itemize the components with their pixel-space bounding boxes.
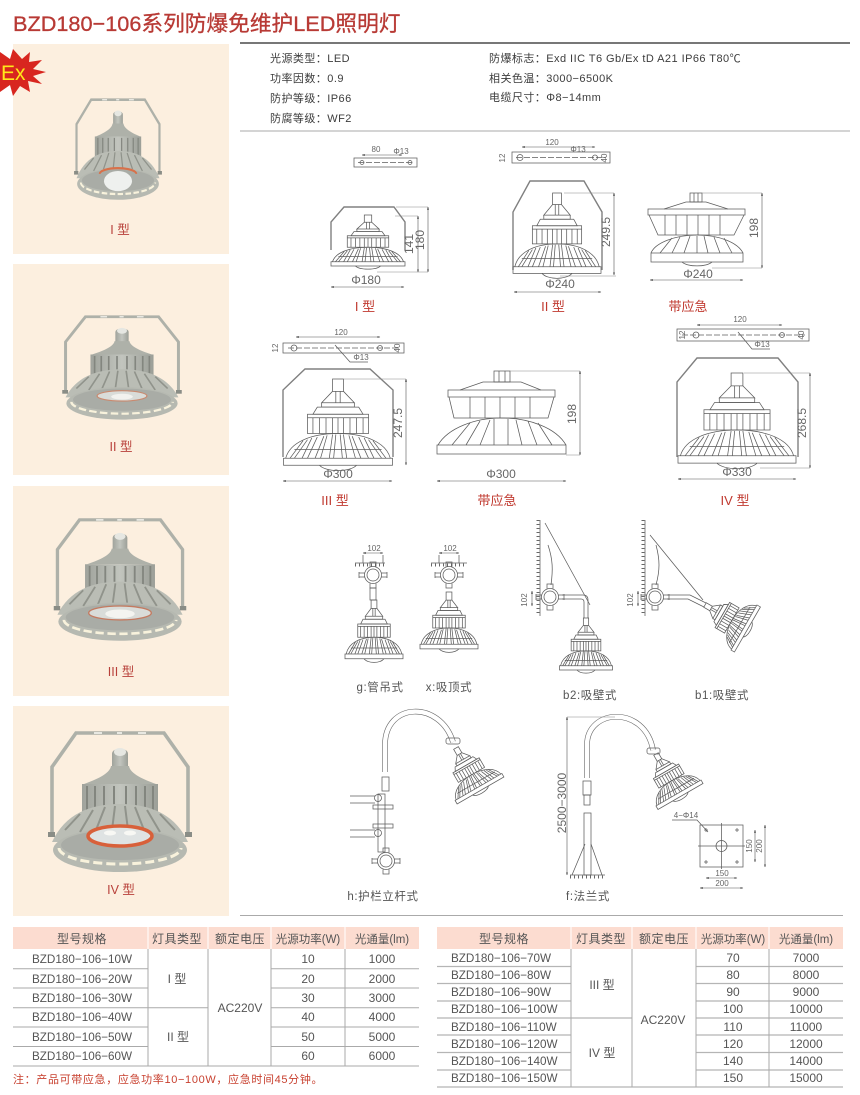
table: right spec table: 光通量(lm): [779, 932, 833, 946]
table: right spec table: 8000: [793, 968, 820, 982]
install: b1 wall: [626, 520, 763, 702]
table: left spec table: 6000: [369, 1049, 396, 1063]
table: right spec table: BZD180−106−80W: [451, 969, 551, 982]
drawing: type II: 249.5: [599, 217, 613, 247]
label: b1: b1:吸壁式: [695, 688, 749, 702]
drawing: type II: [498, 138, 616, 314]
icon: Ex explosion badge: Ex: [1, 62, 26, 85]
table: left spec table: 光源功率(W): [276, 932, 340, 946]
panel: product photo type II: [13, 264, 229, 475]
label: b2: b2:吸壁式: [563, 688, 617, 702]
drawing: emergency 240: 198: [747, 218, 761, 238]
table: right spec table: 型号规格: [479, 931, 529, 946]
drawing: type IV: Φ330: [722, 465, 752, 479]
table: left spec table: BZD180−106−10W: [32, 953, 132, 966]
drawing: emergency 300: 198: [565, 404, 579, 424]
install: b2 wall: 102: [520, 593, 529, 607]
spec: cable size: 电缆尺寸：Φ8−14mm: [489, 90, 601, 104]
flange plan: 150: [715, 869, 729, 878]
flange plan: 150: [745, 839, 754, 853]
table: right spec table: 额定电压: [639, 931, 689, 946]
table: left spec table: BZD180−106−20W: [32, 973, 132, 986]
table: left spec table: 型号规格: [57, 931, 107, 946]
table: left spec table: 40: [301, 1010, 315, 1024]
table: left spec table: 3000: [369, 991, 396, 1005]
spec: light source: 光源类型：LED: [270, 51, 350, 65]
table: left spec table: 20: [301, 972, 315, 986]
table: left spec table: AC220V: [218, 1001, 262, 1015]
drawing: type I: 80: [372, 145, 381, 154]
flange plan: 200: [755, 839, 764, 853]
label: f: f:法兰式: [566, 889, 610, 903]
title: BZD180−106系列防爆免维护LED照明灯: [13, 11, 400, 36]
note: 注：产品可带应急，应急功率10−100W，应急时间45分钟。: [13, 1072, 323, 1086]
table: right spec table: 14000: [789, 1054, 823, 1068]
install: f flange post: [555, 717, 765, 903]
spec: power factor: 功率因数：0.9: [270, 71, 344, 85]
table: left spec table: I 型: [168, 972, 186, 986]
install: g pipe hanging: 102: [367, 544, 381, 553]
table: right spec table: 光源功率(W): [701, 932, 765, 946]
table: right spec table: 10000: [789, 1002, 823, 1016]
table: left spec table: II 型: [167, 1030, 189, 1044]
table: left spec table: 10: [301, 952, 315, 966]
drawing: type III: Φ300: [323, 467, 353, 481]
drawing: type II: Φ13: [570, 145, 586, 154]
table: left spec table: BZD180−106−30W: [32, 992, 132, 1005]
table: left spec table: 50: [301, 1030, 315, 1044]
label: I 型: I 型: [355, 299, 375, 314]
table: right spec table: BZD180−106−70W: [451, 952, 551, 965]
table: left spec table: 光通量(lm): [355, 932, 409, 946]
install: x ceiling: [420, 544, 478, 694]
drawing: emergency 240: [648, 193, 762, 314]
drawing: type IV: 40: [797, 330, 806, 339]
panel: product photo type I: [13, 44, 229, 254]
drawing: emergency 300: Φ300: [486, 467, 516, 481]
label: emergency: 带应急: [668, 299, 708, 314]
table: right spec table: 灯具类型: [576, 932, 626, 946]
drawing: type IV: [677, 315, 810, 508]
label: I 型: I 型: [110, 223, 130, 237]
drawing: type IV: Φ13: [754, 340, 770, 349]
drawing: type III: 120: [334, 328, 348, 337]
label: g: g:管吊式: [356, 680, 404, 694]
drawing: type II: 12: [498, 153, 507, 162]
drawing: emergency 240: Φ240: [683, 267, 713, 281]
table: right spec table: 120: [723, 1037, 743, 1051]
table: right spec table: IV 型: [589, 1046, 615, 1060]
label: III 型: III 型: [321, 493, 349, 508]
table: right spec table: 70: [726, 951, 740, 965]
install: h guard post: [347, 712, 505, 903]
spec: color temperature: 相关色温：3000−6500K: [489, 71, 614, 85]
spec: explosion mark: 防爆标志：Exd IIC T6 Gb/Ex tD A21 IP66 T80℃: [489, 51, 741, 65]
table: right spec table: 7000: [793, 951, 820, 965]
icon: lamp photo IV: [48, 732, 192, 872]
table: right spec table: AC220V: [641, 1013, 685, 1027]
table: right spec table: III 型: [589, 978, 615, 992]
install: b1 wall: 102: [626, 593, 635, 607]
table: right spec table: BZD180−106−90W: [451, 986, 551, 999]
table: right spec table: 9000: [793, 985, 820, 999]
label: emergency: 带应急: [477, 493, 517, 508]
install: x ceiling: 102: [443, 544, 457, 553]
drawing: type I: Φ180: [351, 273, 381, 287]
table: right spec table: 90: [726, 985, 740, 999]
flange plan: 200: [715, 879, 729, 888]
table: right spec table: BZD180−106−100W: [451, 1003, 558, 1016]
table: right spec table: BZD180−106−150W: [451, 1072, 558, 1085]
install: g pipe hanging: [345, 544, 404, 694]
drawing: type II: 40: [600, 153, 609, 162]
icon: Ex explosion badge: [0, 49, 46, 96]
table: right spec table: 110: [723, 1020, 743, 1034]
spec panel: [240, 42, 850, 132]
table: right spec table: [437, 927, 843, 1087]
drawing: type II: Φ240: [545, 277, 575, 291]
table: left spec table: 额定电压: [215, 931, 265, 946]
table: right spec table: 150: [723, 1071, 743, 1085]
drawing: type IV: 268.5: [795, 408, 809, 438]
label: x: x:吸顶式: [426, 681, 472, 694]
table: right spec table: 100: [723, 1002, 743, 1016]
table: left spec table: [13, 927, 419, 1066]
label: III 型: III 型: [108, 665, 134, 679]
table: right spec table: 15000: [789, 1071, 823, 1085]
label: IV 型: IV 型: [721, 493, 749, 508]
table: left spec table: BZD180−106−60W: [32, 1050, 132, 1063]
table: right spec table: 11000: [790, 1020, 823, 1034]
label: II 型: II 型: [541, 299, 565, 314]
table: right spec table: 12000: [789, 1037, 823, 1051]
table: left spec table: BZD180−106−50W: [32, 1031, 132, 1044]
drawing: type III: 247.5: [391, 408, 405, 438]
drawing: type I: 180: [413, 230, 427, 250]
spec: anticorrosion grade: 防腐等级：WF2: [270, 111, 352, 125]
install: f flange post: 2500−3000: [555, 772, 569, 833]
icon: lamp photo III: [54, 519, 186, 641]
label: IV 型: IV 型: [107, 883, 135, 897]
drawing: type III: 40: [393, 343, 402, 352]
drawing: type III: Φ13: [353, 353, 369, 362]
drawing: type III: 12: [271, 343, 280, 352]
table: right spec table: 140: [723, 1054, 743, 1068]
icon: lamp photo I: [74, 99, 162, 200]
table: left spec table: 5000: [369, 1030, 396, 1044]
drawing: type I: Φ13: [393, 147, 409, 156]
label: h: h:护栏立杆式: [347, 889, 419, 903]
flange plan: 4−Φ14: [674, 811, 699, 820]
drawing: type IV: 12: [678, 330, 687, 339]
panel: product photo type III: [13, 486, 229, 696]
table: left spec table: 30: [301, 991, 315, 1005]
spec: protection grade: 防护等级：IP66: [270, 91, 352, 105]
table: left spec table: 1000: [369, 952, 396, 966]
drawing: type II: 120: [545, 138, 559, 147]
table: left spec table: 2000: [369, 972, 396, 986]
table: left spec table: 灯具类型: [152, 932, 202, 946]
table: left spec table: 60: [301, 1049, 315, 1063]
table: right spec table: BZD180−106−110W: [451, 1021, 557, 1034]
label: II 型: II 型: [110, 440, 132, 454]
icon: lamp photo II: [62, 316, 182, 420]
drawing: type I: 141: [402, 234, 416, 254]
table: right spec table: BZD180−106−140W: [451, 1055, 558, 1068]
drawing: type III: [271, 328, 406, 508]
table: left spec table: BZD180−106−40W: [32, 1011, 132, 1024]
drawing: type IV: 120: [733, 315, 747, 324]
table: right spec table: BZD180−106−120W: [451, 1038, 558, 1051]
drawing: emergency 300: [437, 371, 580, 508]
drawing: type I: [331, 145, 428, 314]
table: left spec table: 4000: [369, 1010, 396, 1024]
table: right spec table: 80: [726, 968, 740, 982]
flange plan: [672, 811, 765, 888]
panel: product photo type IV: [13, 706, 229, 916]
install: b2 wall: [520, 520, 617, 702]
